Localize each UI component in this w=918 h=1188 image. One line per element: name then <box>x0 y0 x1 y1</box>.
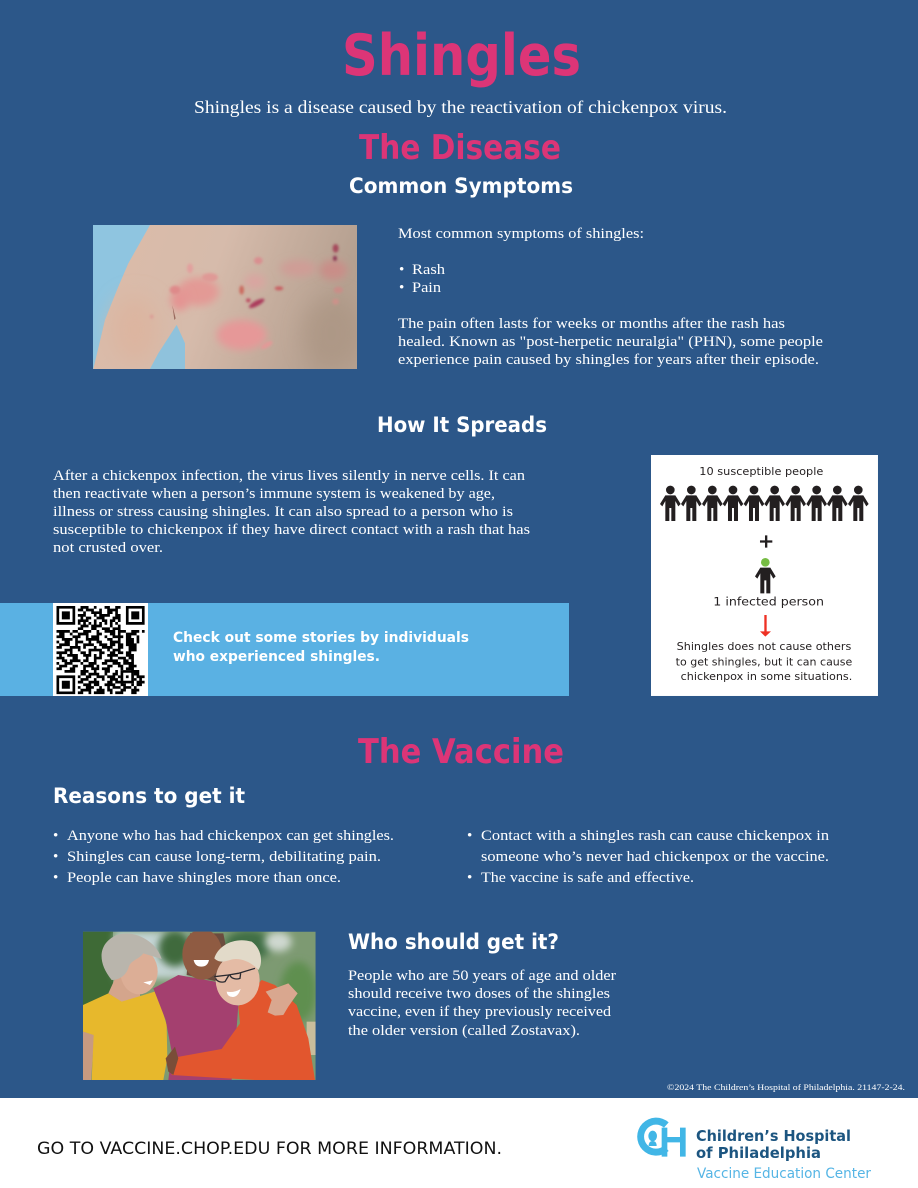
callout text: who experienced shingles. <box>173 649 380 665</box>
panel: stories callout band <box>0 603 569 696</box>
list: reasons right column: The vaccine is safe and effective. <box>481 869 694 886</box>
diagram caption <box>676 641 852 683</box>
heading: the disease: The Disease <box>359 128 561 168</box>
icon: plus <box>760 535 772 548</box>
list: reasons left column: • <box>53 848 58 865</box>
text: how it spreads paragraph: illness or stress causing shingles. It can also spread to a person who is <box>53 503 513 520</box>
diagram caption: to get shingles, but it can cause <box>676 656 852 668</box>
heading: common symptoms: Common Symptoms <box>349 174 573 199</box>
text: who should get it paragraph: vaccine, even if they previously received <box>348 1003 611 1020</box>
subtitle: Shingles is a disease caused by the reactivation of chickenpox virus. <box>194 97 727 117</box>
text: how it spreads paragraph: After a chickenpox infection, the virus lives silently in nerve cells. It can <box>53 467 525 484</box>
qr code <box>53 603 148 696</box>
photo: shingles rash on torso <box>93 225 362 370</box>
text: symptoms list: Most common symptoms of shingles: <box>398 225 644 242</box>
text: who should get it paragraph: the older version (called Zostavax). <box>348 1022 580 1039</box>
heading: how it spreads: How It Spreads <box>377 413 547 438</box>
text: how it spreads paragraph: then reactivate when a person’s immune system is weakened by age, <box>53 485 495 502</box>
panel: footer <box>0 1098 918 1188</box>
text: symptoms list: The pain often lasts for weeks or months after the rash has <box>398 315 785 332</box>
diagram caption: Shingles does not cause others <box>677 641 851 653</box>
callout text: Check out some stories by individuals <box>173 630 469 646</box>
logo: Children's Hospital of Philadelphia: of Philadelphia <box>696 1144 821 1162</box>
diagram label: infected person: 1 infected person <box>713 594 824 608</box>
text: symptoms list: • <box>399 261 404 278</box>
logo: Children's Hospital of Philadelphia <box>637 1118 871 1182</box>
photo: three laughing older women <box>83 929 317 1080</box>
text: symptoms list: Pain <box>412 279 441 296</box>
icon: infected person <box>755 558 776 593</box>
text: how it spreads paragraph: not crusted over. <box>53 539 163 556</box>
list: reasons right column: • <box>467 827 472 844</box>
heading: who should get it: Who should get it? <box>348 930 559 955</box>
callout text <box>173 630 469 665</box>
list: reasons right column: Contact with a shingles rash can cause chickenpox in <box>481 827 829 844</box>
text: who should get it paragraph: People who are 50 years of age and older <box>348 967 616 984</box>
text: who should get it paragraph <box>348 967 616 1039</box>
list: reasons right column: • <box>467 869 472 886</box>
list: reasons left column: • <box>53 869 58 886</box>
footer call to action: GO TO VACCINE.CHOP.EDU FOR MORE INFORMATION. <box>37 1139 502 1159</box>
list: reasons left column: • <box>53 827 58 844</box>
list: reasons left column: Shingles can cause long-term, debilitating pain. <box>67 848 381 865</box>
panel: transmission diagram <box>651 455 878 696</box>
list: reasons right column: someone who’s never had chickenpox or the vaccine. <box>481 848 829 865</box>
text: symptoms list: Rash <box>412 261 445 278</box>
list: reasons left column <box>53 827 394 886</box>
title: Shingles <box>342 23 581 89</box>
logo: Children's Hospital of Philadelphia: Children’s Hospital <box>696 1127 851 1145</box>
text: symptoms list: • <box>399 279 404 296</box>
copyright: ©2024 The Children’s Hospital of Philadelphia. 21147-2-24. <box>667 1082 905 1092</box>
text: how it spreads paragraph <box>53 467 530 556</box>
list: reasons right column <box>467 827 829 886</box>
text: symptoms list <box>398 225 823 368</box>
logo: Children's Hospital of Philadelphia: Vaccine Education Center <box>697 1166 871 1182</box>
text: symptoms list: experience pain caused by shingles for years after their episode. <box>398 351 819 368</box>
icons: ten susceptible people <box>660 486 869 521</box>
arrow: red down <box>760 615 771 637</box>
diagram caption: chickenpox in some situations. <box>681 671 852 683</box>
heading: reasons to get it: Reasons to get it <box>53 784 245 809</box>
text: symptoms list: healed. Known as "post-herpetic neuralgia" (PHN), some people <box>398 333 823 350</box>
list: reasons left column: People can have shingles more than once. <box>67 869 341 886</box>
logo mark <box>637 1118 686 1157</box>
text: how it spreads paragraph: susceptible to chickenpox if they have direct contact with a rash that has <box>53 521 530 538</box>
text: who should get it paragraph: should receive two doses of the shingles <box>348 985 610 1002</box>
diagram label: susceptible people: 10 susceptible people <box>699 466 823 478</box>
list: reasons left column: Anyone who has had chickenpox can get shingles. <box>67 827 394 844</box>
heading: the vaccine: The Vaccine <box>358 732 564 772</box>
